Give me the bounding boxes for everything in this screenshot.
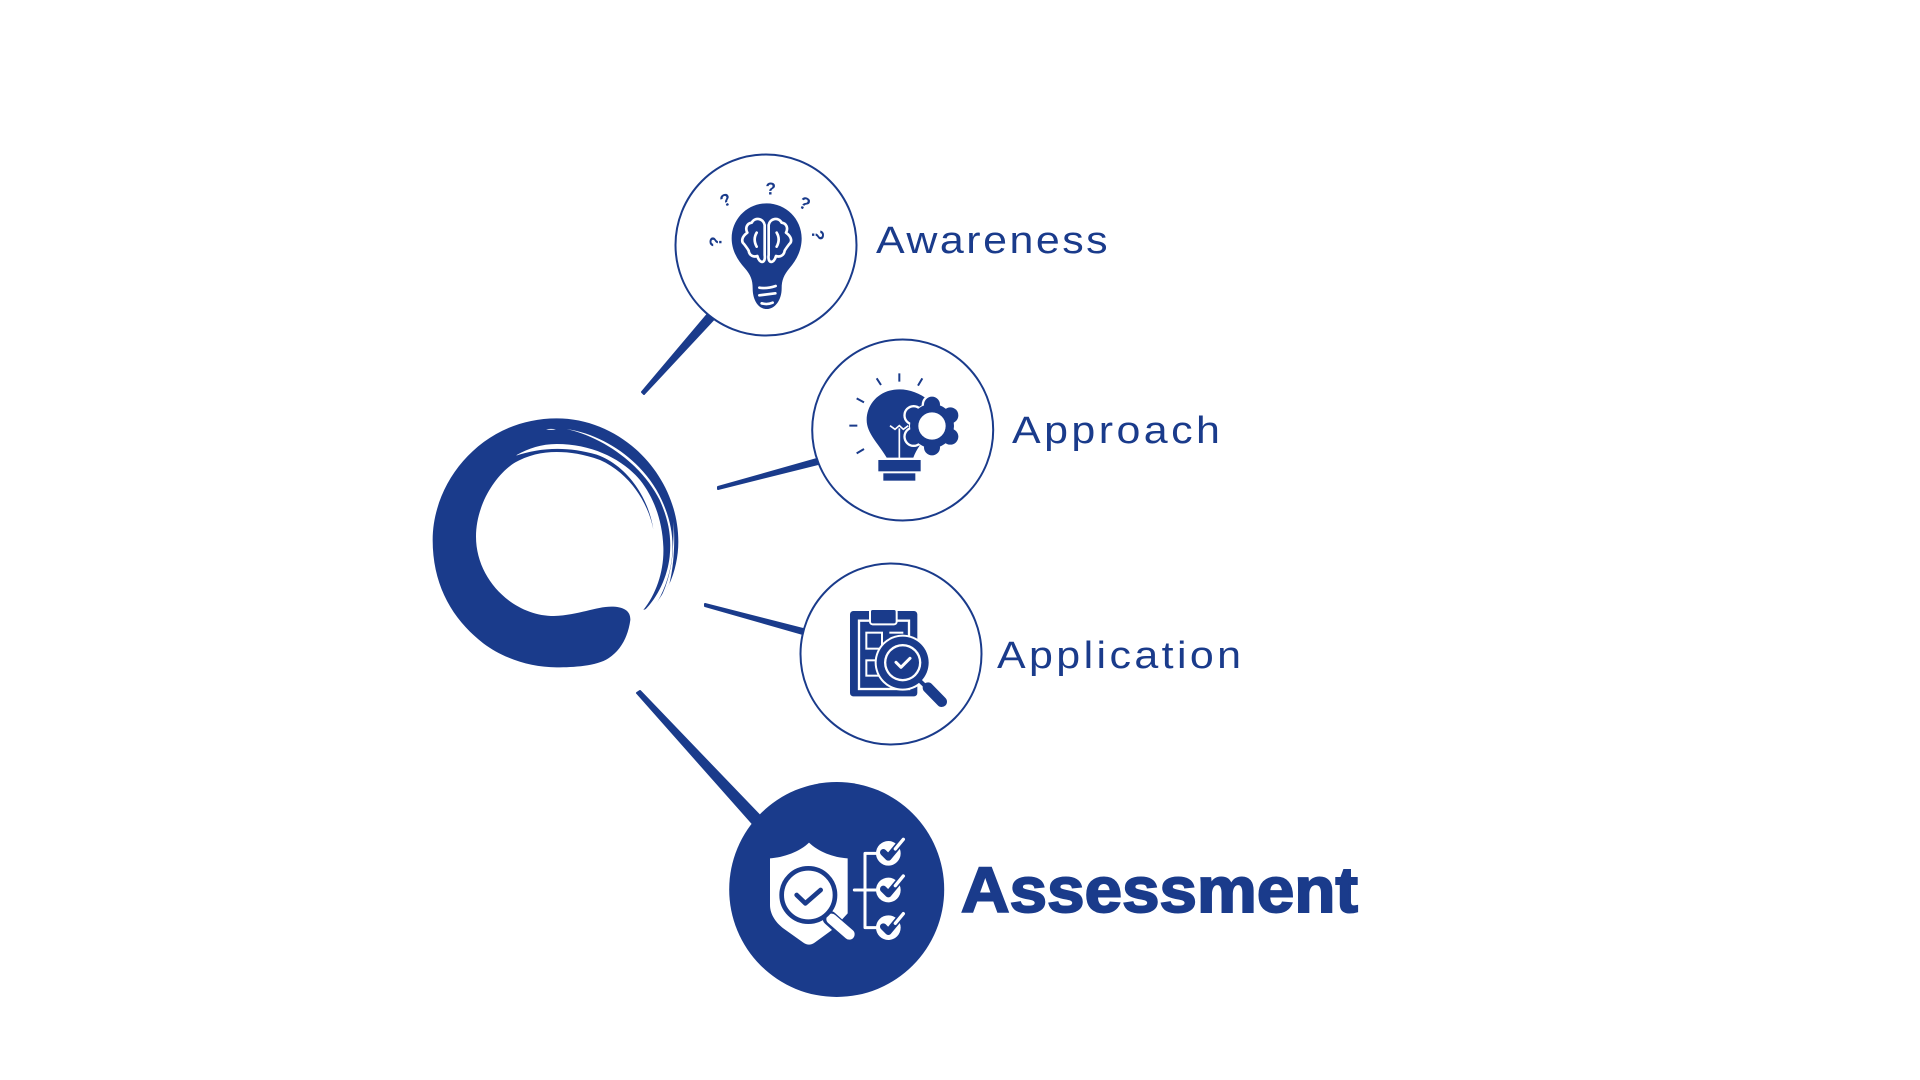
icon: lightbulb with gear [849, 373, 958, 481]
connector line: application [705, 604, 803, 634]
icon: lightbulb with brain: ? [796, 192, 814, 215]
connector line: awareness [642, 315, 713, 394]
connector line: assessment [637, 691, 760, 824]
label: Approach: Approach [1012, 408, 1220, 451]
enso brush circle [433, 418, 678, 667]
label: Application: Application [997, 633, 1241, 676]
node: approach circle [812, 340, 993, 520]
label: Awareness: Awareness [876, 218, 1108, 261]
icon: shield, magnifier and checklist [770, 839, 903, 945]
icon: lightbulb with brain [705, 178, 828, 309]
icon: lightbulb with brain: ? [808, 230, 828, 240]
icon: lightbulb with brain: ? [717, 189, 735, 211]
connector line: approach [718, 459, 818, 489]
icon: clipboard with magnifier [850, 609, 942, 702]
label: Assessment: Assessment [961, 854, 1358, 926]
node: awareness circle [676, 154, 856, 336]
icon: lightbulb with brain: ? [765, 178, 776, 198]
icon: lightbulb with brain: ? [705, 236, 725, 247]
node: application circle [800, 564, 982, 744]
node: assessment filled circle [729, 782, 944, 997]
